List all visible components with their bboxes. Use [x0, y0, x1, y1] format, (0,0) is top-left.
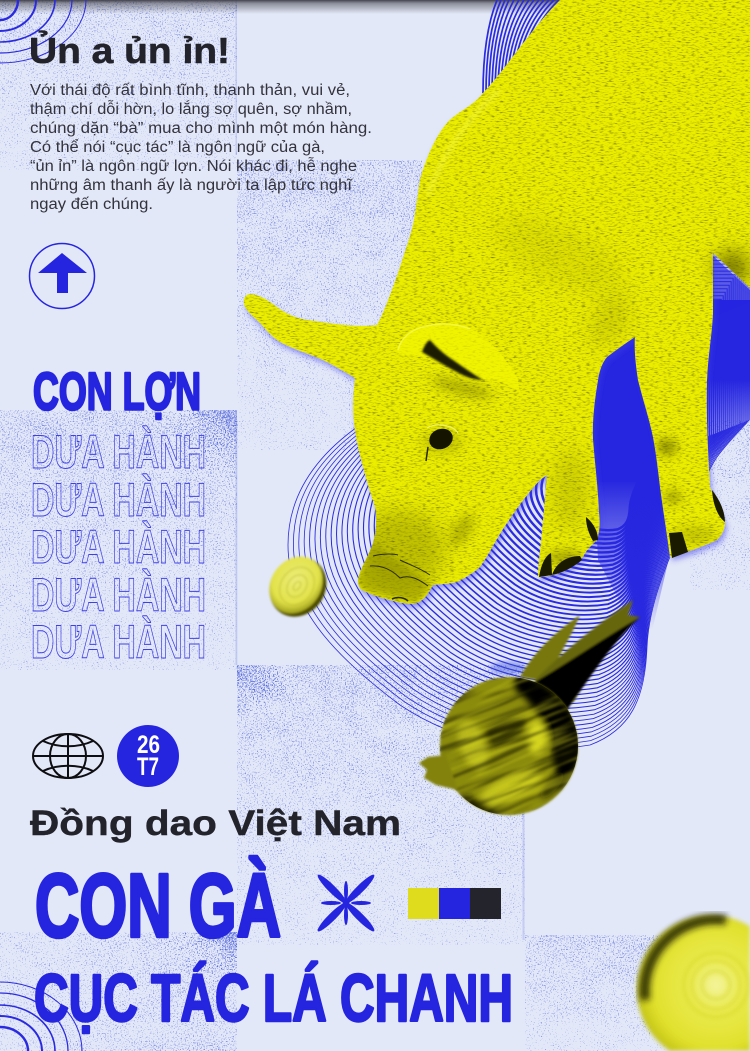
subtitle: Đồng dao Việt Nam: Đồng dao Việt Nam	[30, 804, 401, 843]
repeated outline text: DƯA HÀNH: DƯA HÀNH	[31, 615, 206, 668]
pig body	[244, 0, 750, 604]
colour swatches	[408, 888, 501, 919]
onion bulb	[440, 677, 578, 815]
top ribbon arcs	[483, 0, 559, 93]
corner arcs top left	[0, 0, 86, 63]
date badge: T7	[137, 753, 159, 781]
onion streaks	[440, 677, 578, 815]
pig	[240, 0, 750, 610]
repeated outline text: DƯA HÀNH	[31, 425, 206, 668]
date badge	[117, 725, 179, 787]
contour line swirl	[288, 240, 749, 749]
ear	[397, 323, 520, 392]
solid blue behind legs	[590, 255, 750, 640]
blue smudge behind onion	[490, 661, 526, 675]
heading: CON GÀ: CON GÀ	[35, 856, 281, 956]
body paragraph: chúng dặn “bà” mua cho mình một món hàng.	[30, 120, 372, 137]
pig shading and fur	[240, 0, 750, 610]
onion	[418, 599, 641, 817]
date badge: 26	[137, 731, 160, 759]
body paragraph: Có thể nói “cục tác” là ngôn ngữ của gà,	[30, 139, 325, 156]
heading: CỤC TÁC LÁ CHANH: CỤC TÁC LÁ CHANH	[34, 961, 513, 1036]
heading: CON LỢN: CON LỢN	[33, 362, 201, 422]
repeated outline text: DƯA HÀNH: DƯA HÀNH	[31, 568, 206, 621]
hooves	[539, 490, 725, 577]
back ridge highlight	[428, 90, 500, 195]
icon: up arrow in circle	[30, 244, 94, 308]
body paragraph: những âm thanh ấy là người ta lập tức nghĩ	[30, 177, 353, 194]
onion leaves	[520, 600, 640, 715]
eye	[426, 425, 458, 461]
repeated outline text: DƯA HÀNH: DƯA HÀNH	[31, 520, 206, 573]
small coin	[258, 546, 338, 628]
repeated outline text: DƯA HÀNH: DƯA HÀNH	[31, 473, 206, 526]
nostril wrinkles	[370, 554, 430, 601]
repeated outline text: DƯA HÀNH: DƯA HÀNH	[31, 425, 206, 478]
body paragraph: Với thái độ rất bình tĩnh, thanh thản, vui vẻ,	[30, 82, 350, 99]
top edge shadow	[0, 0, 750, 14]
icon: flower star	[315, 872, 377, 934]
body paragraph	[30, 82, 372, 213]
title: Ủn a ủn ỉn!: Ủn a ủn ỉn!	[29, 29, 230, 71]
onion root	[419, 755, 458, 790]
body paragraph: “ủn ỉn” là ngôn ngữ lợn. Nói khác đi, hễ nghe	[30, 158, 357, 175]
large coin bottom right	[637, 915, 750, 1051]
icon: globe	[33, 734, 103, 778]
corner arcs bottom left	[0, 982, 82, 1051]
snout shading	[358, 543, 432, 603]
body paragraph: thậm chí dỗi hờn, lo lắng sợ quên, sợ nhầm,	[30, 101, 352, 118]
body paragraph: ngay đến chúng.	[30, 196, 153, 213]
